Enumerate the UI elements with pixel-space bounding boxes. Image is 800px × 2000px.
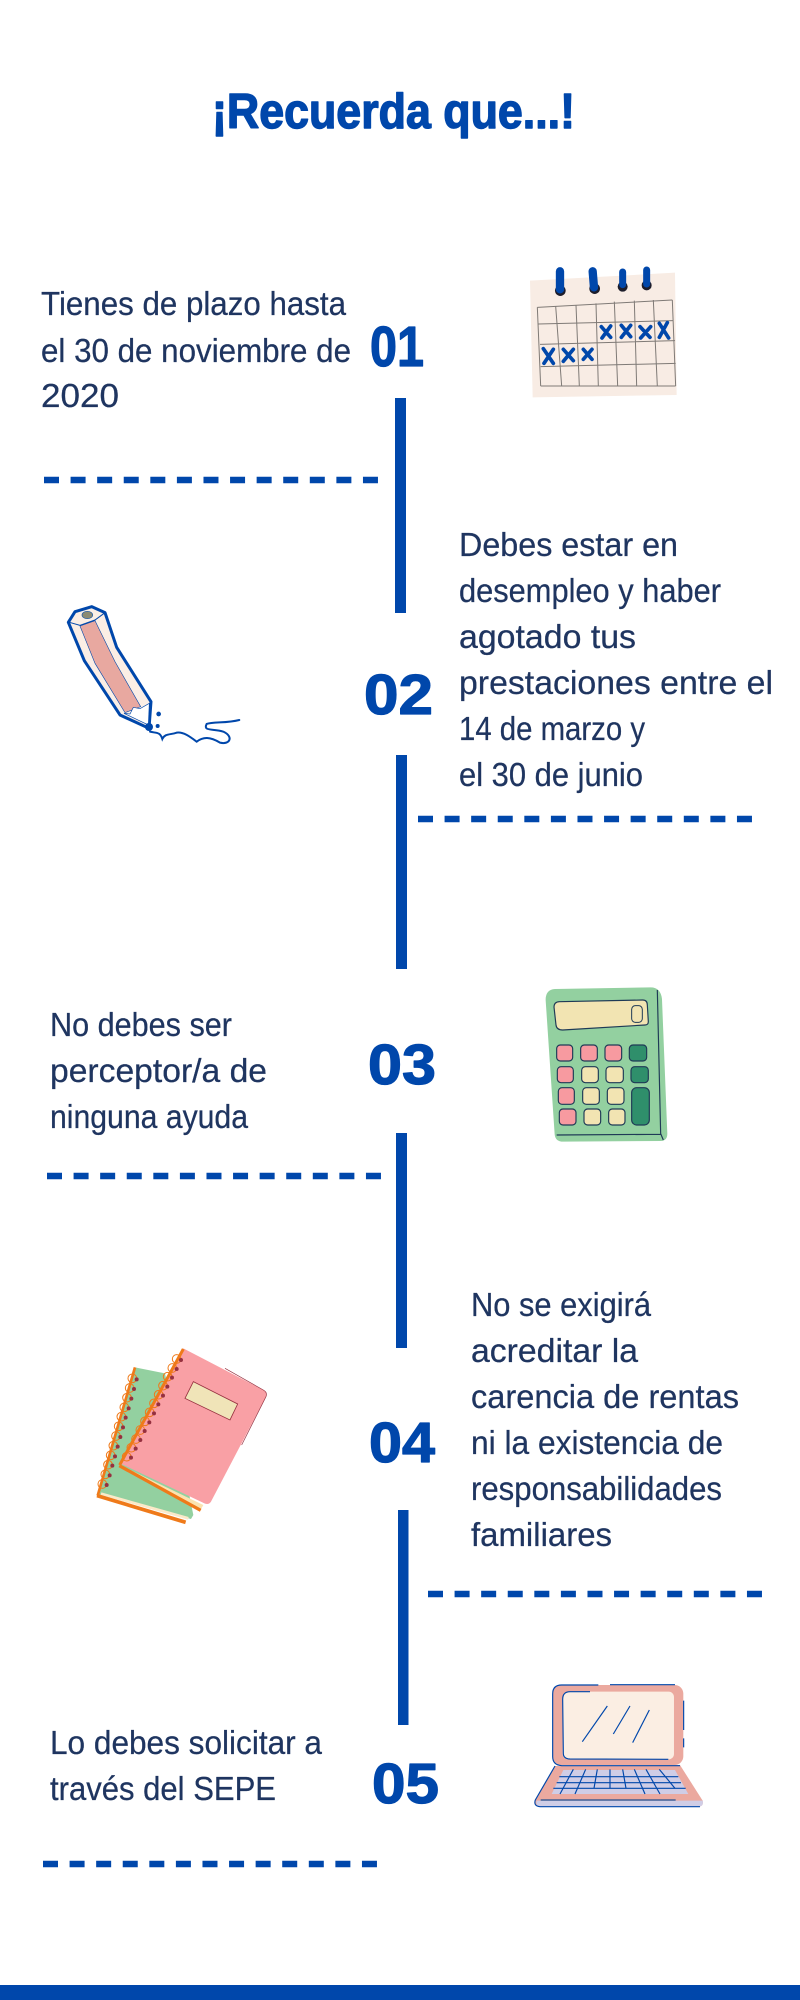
text block: item 5 xyxy=(50,1724,323,1807)
vertical line 4 xyxy=(398,1510,408,1725)
text block: item 4: familiares xyxy=(471,1516,612,1553)
number 05: 05 xyxy=(372,1752,439,1816)
text block: item 2: desempleo y haber xyxy=(459,572,721,609)
vertical line 3 xyxy=(396,1133,407,1348)
text block: item 1 xyxy=(41,285,351,414)
dashed divider 3 xyxy=(47,1173,381,1179)
text block: item 1: 2020 xyxy=(41,377,119,414)
dashed divider 4 xyxy=(428,1591,762,1597)
icon: calendar xyxy=(530,270,677,397)
text block: item 2: prestaciones entre el xyxy=(459,664,773,701)
icon: notebooks xyxy=(97,1348,266,1522)
text block: item 2: Debes estar en xyxy=(459,526,678,563)
icon: laptop xyxy=(534,1685,703,1807)
text block: item 3 xyxy=(50,1006,267,1135)
text block: item 4: responsabilidades xyxy=(471,1470,722,1507)
text block: item 2: agotado tus xyxy=(459,618,636,655)
text block: item 2 xyxy=(459,526,773,793)
dashed divider 1 xyxy=(44,477,378,483)
icon: pencil xyxy=(68,607,239,743)
text block: item 1: el 30 de noviembre de xyxy=(41,332,351,369)
dashed divider 5 xyxy=(43,1861,377,1867)
number 03: 03 xyxy=(368,1033,436,1097)
number 01: 01 xyxy=(370,315,424,379)
text block: item 1: Tienes de plazo hasta xyxy=(41,285,347,322)
text block: item 4 xyxy=(471,1286,739,1553)
number 04: 04 xyxy=(369,1411,435,1475)
text block: item 3: perceptor/a de xyxy=(50,1052,267,1089)
text block: item 4: No se exigirá xyxy=(471,1286,652,1323)
icon: calculator xyxy=(546,987,667,1142)
bottom bar xyxy=(0,1985,800,2000)
text block: item 4: acreditar la xyxy=(471,1332,639,1369)
text block: item 3: ninguna ayuda xyxy=(50,1098,249,1135)
vertical line 2 xyxy=(396,755,407,969)
text block: item 5: través del SEPE xyxy=(50,1770,276,1807)
title: ¡Recuerda que...! xyxy=(212,85,575,139)
text block: item 4: carencia de rentas xyxy=(471,1378,739,1415)
text block: item 2: el 30 de junio xyxy=(459,756,643,793)
text block: item 3: No debes ser xyxy=(50,1006,232,1043)
text block: item 4: ni la existencia de xyxy=(471,1424,723,1461)
vertical line 1 xyxy=(395,398,406,613)
green notebook xyxy=(97,1367,193,1522)
text block: item 2: 14 de marzo y xyxy=(459,710,645,747)
dashed divider 2 xyxy=(418,816,752,822)
pink notebook xyxy=(119,1348,266,1511)
number 02: 02 xyxy=(364,663,433,727)
text block: item 5: Lo debes solicitar a xyxy=(50,1724,323,1761)
